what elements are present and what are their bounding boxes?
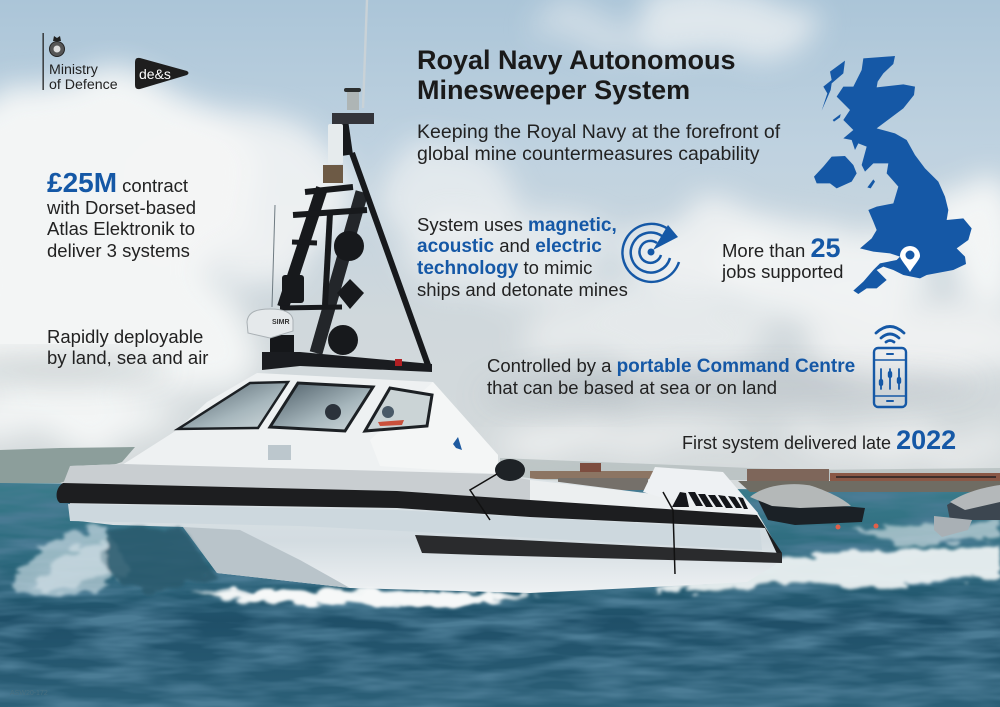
- Isle of Man: [867, 179, 875, 188]
- mast sensors and day shapes: [282, 88, 374, 355]
- engine vents: [672, 492, 748, 509]
- bow waterline spray: [30, 528, 540, 605]
- subtitle: [417, 121, 781, 165]
- windscreen centre: [270, 383, 373, 431]
- sea: [0, 480, 1000, 707]
- title: [417, 45, 736, 105]
- technology callout: ships and detonate mines: [417, 279, 628, 300]
- radar dome: [247, 309, 294, 361]
- lower black strake: [415, 535, 782, 563]
- jobs callout: More than 25: [722, 233, 840, 263]
- Northern Ireland: [814, 156, 857, 188]
- subtitle: global mine countermeasures capability: [417, 143, 760, 165]
- UK map: [814, 56, 972, 294]
- technology callout: acoustic and electric: [417, 235, 602, 257]
- subtitle: Keeping the Royal Navy at the forefront of: [417, 121, 781, 143]
- logo: Ministry of Defence: of Defence: [49, 77, 118, 93]
- logo: Ministry of Defence: Ministry: [49, 62, 99, 78]
- hull: [57, 459, 782, 593]
- Outer Hebrides: [822, 61, 845, 111]
- command centre callout: that can be based at sea or on land: [487, 377, 777, 398]
- jobs callout: jobs supported: [721, 261, 843, 282]
- logo: de&s: [135, 58, 188, 89]
- deployment callout: Rapidly deployable: [47, 326, 203, 347]
- Inner islands: [833, 114, 841, 122]
- side window: [365, 388, 432, 431]
- contract callout: deliver 3 systems: [47, 240, 190, 261]
- icon: phone with wifi and sliders: [874, 326, 906, 407]
- upper black fender: [57, 483, 782, 556]
- radar dome: SIMR: [272, 319, 290, 326]
- contract callout: Atlas Elektronik to: [47, 218, 195, 239]
- mast antennas: [272, 0, 367, 307]
- deployment callout: [47, 326, 208, 368]
- autonomous vessel: [30, 0, 782, 605]
- sky background with clouds: [0, 0, 1000, 495]
- crest: [50, 36, 64, 56]
- technology callout: System uses magnetic,: [417, 214, 617, 236]
- contract callout: £25M contract: [47, 167, 188, 198]
- contract callout: with Dorset-based: [46, 197, 196, 218]
- distant coastline and breakwater: [0, 447, 1000, 492]
- technology callout: technology to mimic: [417, 257, 592, 279]
- logo: de&s: de&s: [139, 66, 171, 82]
- logo: Ministry of Defence: [42, 33, 118, 93]
- cabin: [122, 352, 498, 476]
- command centre callout: [487, 355, 855, 398]
- engine housing: [643, 467, 758, 513]
- icon: radar: [622, 224, 679, 282]
- title: Royal Navy Autonomous: [417, 45, 736, 75]
- mast frame: [280, 120, 428, 365]
- technology callout: [417, 214, 628, 300]
- delivery callout: First system delivered late 2022: [682, 425, 956, 455]
- background safety boats: [750, 484, 1000, 537]
- icon: location pin: [900, 246, 920, 272]
- contract callout: [46, 167, 196, 261]
- deployment callout: by land, sea and air: [47, 347, 208, 368]
- windscreen port: [178, 382, 288, 429]
- title: Minesweeper System: [417, 75, 690, 105]
- jobs callout: [721, 233, 843, 282]
- Great Britain: [837, 56, 972, 294]
- fender buoy and cable: [470, 459, 675, 574]
- reference code: ASW20-172: [10, 690, 48, 697]
- command centre callout: Controlled by a portable Command Centre: [487, 355, 855, 377]
- wake and spray: [15, 518, 1000, 606]
